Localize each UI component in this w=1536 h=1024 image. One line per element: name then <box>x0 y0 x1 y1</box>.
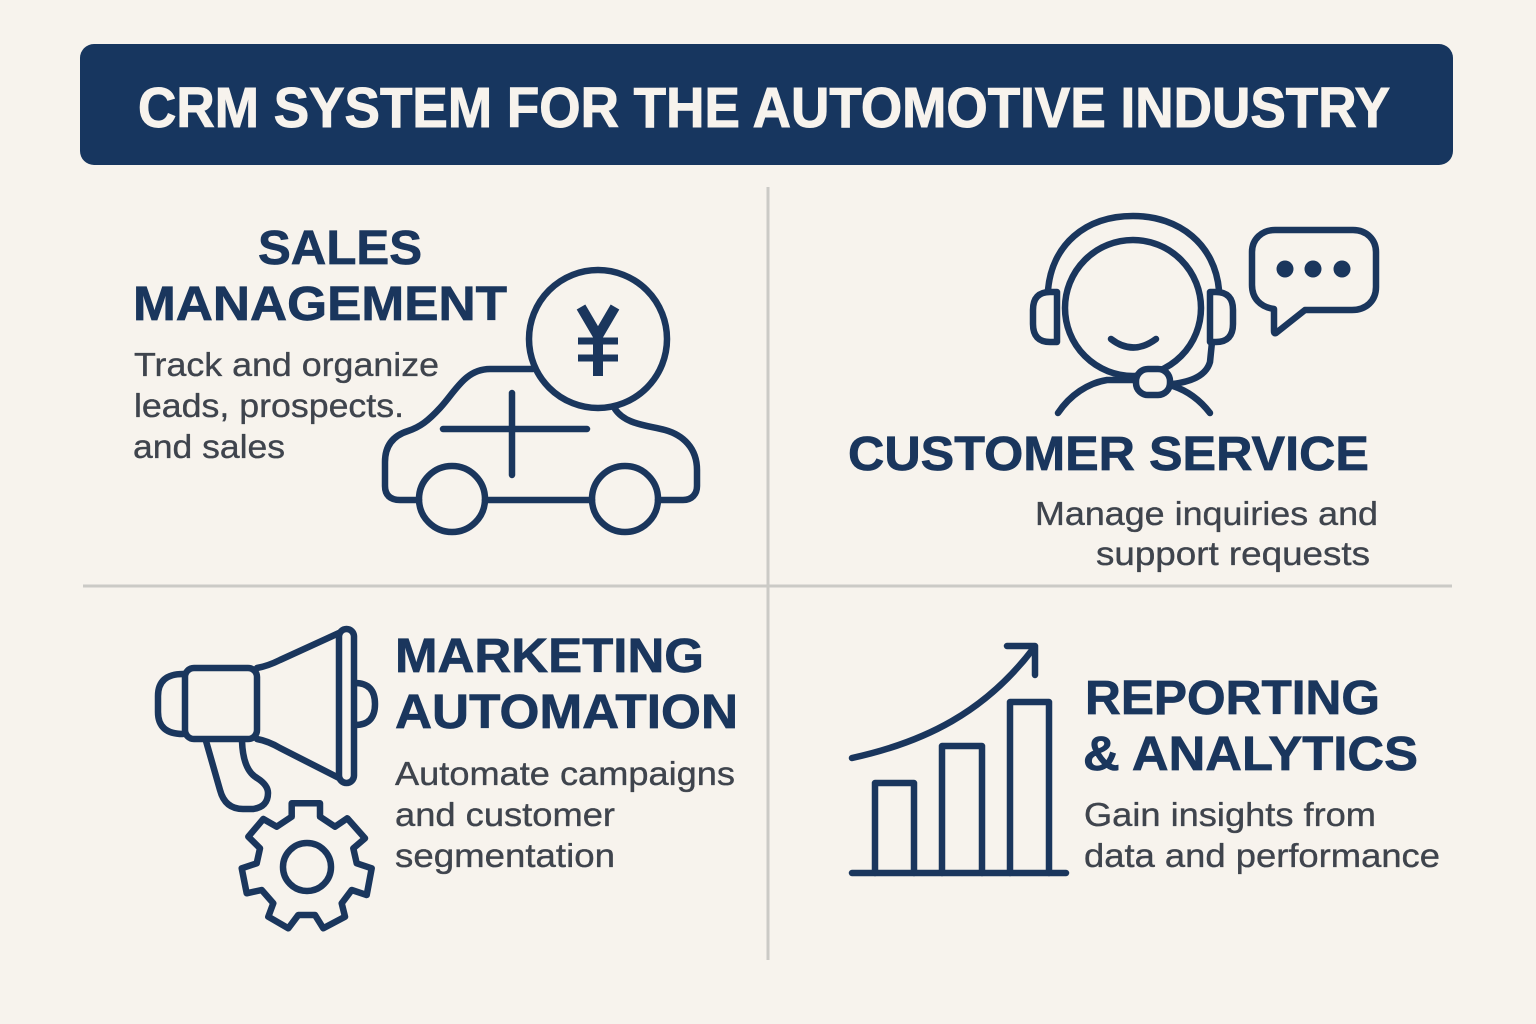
heading: marketing automation <box>395 630 738 739</box>
heading: reporting and analytics <box>1083 672 1418 781</box>
heading: reporting and analytics: & ANALYTICS <box>1083 728 1418 781</box>
text: sales description: leads, prospects. <box>134 387 404 424</box>
icon: car with yen coin <box>385 270 697 532</box>
icon: bar chart with rising arrow <box>852 646 1066 873</box>
text: marketing description: segmentation <box>395 837 615 874</box>
text: marketing description: Automate campaigns <box>395 755 735 792</box>
text: reporting description: Gain insights from <box>1084 796 1376 833</box>
text: marketing description <box>395 755 735 874</box>
text: sales description: Track and organize <box>134 346 439 383</box>
panel: marketing automation <box>158 629 738 928</box>
panel: customer service <box>848 216 1378 572</box>
panel: reporting and analytics <box>852 646 1440 874</box>
text: customer service description: support requests <box>1096 535 1370 572</box>
text: customer service description: Manage inquiries and <box>1035 495 1378 532</box>
heading: sales management: SALES <box>258 222 422 275</box>
text: sales description <box>133 346 439 465</box>
icon: megaphone <box>158 629 375 809</box>
text: customer service description <box>1035 495 1378 572</box>
title banner: CRM SYSTEM FOR THE AUTOMOTIVE INDUSTRY <box>138 76 1390 140</box>
icon: agent with headset <box>1033 216 1233 413</box>
heading: customer service: CUSTOMER SERVICE <box>848 428 1369 481</box>
heading: sales management: MANAGEMENT <box>133 278 507 331</box>
heading: marketing automation: AUTOMATION <box>395 686 738 739</box>
title banner <box>80 44 1453 165</box>
text: reporting description <box>1084 796 1440 874</box>
heading: reporting and analytics: REPORTING <box>1085 672 1380 725</box>
heading: sales management <box>133 222 507 331</box>
panel: sales management <box>133 222 697 532</box>
icon: gear <box>242 803 372 928</box>
icon: speech bubble <box>1252 230 1376 333</box>
text: marketing description: and customer <box>395 796 615 833</box>
text: reporting description: data and performance <box>1084 837 1440 874</box>
heading: marketing automation: MARKETING <box>395 630 704 683</box>
text: sales description: and sales <box>133 428 285 465</box>
